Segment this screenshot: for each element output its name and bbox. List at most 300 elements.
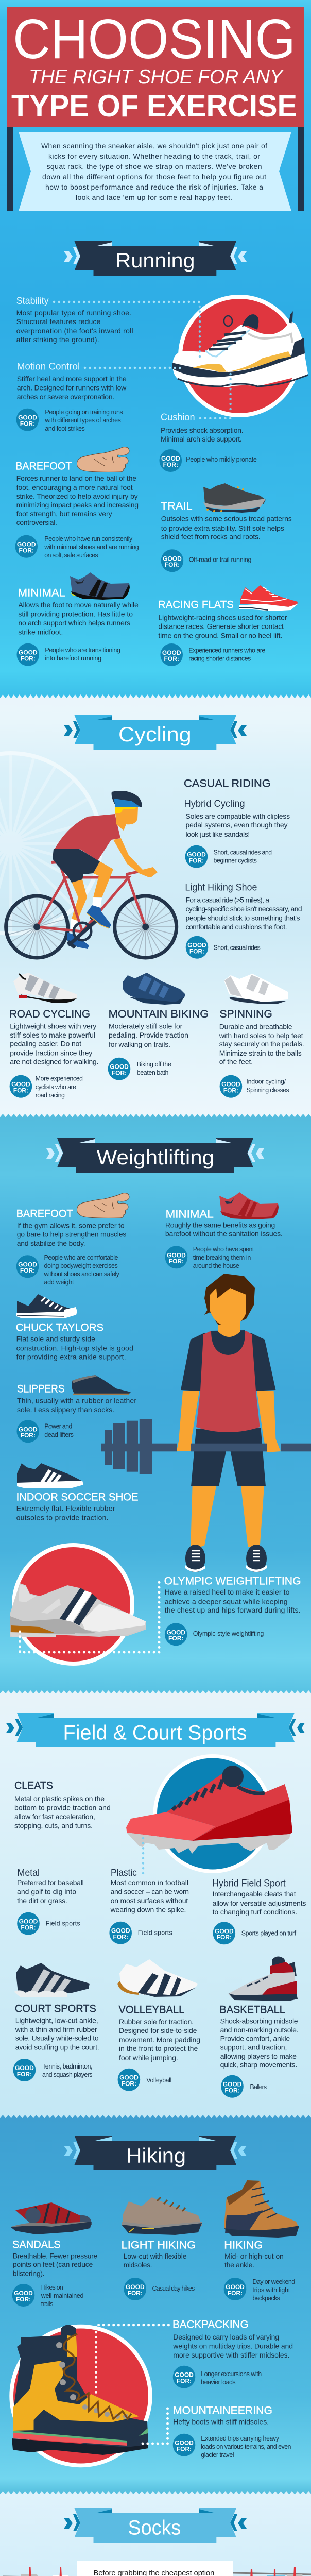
icon: basketball shoe — [228, 1956, 298, 2001]
good for: trail: FOR: — [165, 561, 180, 568]
olympic weightlifting block — [164, 1575, 301, 1614]
olympic shoe illustration — [10, 1543, 146, 1666]
good for: mountaineering — [173, 2434, 291, 2459]
boot connector dots — [96, 2325, 168, 2395]
panel: field and court sports — [0, 1690, 311, 2118]
good for: minimal lifting: around the house — [193, 1262, 239, 1269]
good for: mountain biking: Biking off the — [137, 1061, 171, 1068]
title: THE RIGHT SHOE FOR ANY — [29, 66, 284, 88]
racing flats block: distance races. Generate shorter contact — [158, 622, 284, 631]
plastic block: wearing down the spike. — [110, 1906, 186, 1914]
hiking block — [224, 2180, 299, 2269]
backpacking block: more supportive with stiffer midsoles. — [173, 2351, 289, 2359]
racing flats block: RACING FLATS — [158, 599, 234, 611]
olympic weightlifting block: OLYMPIC WEIGHTLIFTING — [164, 1575, 301, 1587]
basketball block — [219, 1956, 299, 2069]
trail block — [161, 483, 292, 541]
basketball block: allowing players to make — [220, 2052, 297, 2060]
basketball block: BASKETBALL — [219, 2004, 285, 2016]
good for: light hiking — [124, 2278, 195, 2300]
cyclist on bike illustration — [6, 791, 177, 958]
good for: spinning — [220, 1075, 289, 1098]
icon: court shoe — [14, 1963, 90, 1997]
olympic weightlifting block: Have a raised heel to make it easier to — [165, 1588, 290, 1596]
good for: mountain biking — [108, 1058, 171, 1080]
panel: title header — [7, 7, 304, 211]
good for: hybrid: beginner cyclists — [213, 857, 257, 864]
shorts — [191, 1428, 266, 1486]
barefoot block: controversial. — [16, 518, 57, 527]
hybrid field sport block — [212, 1878, 306, 1916]
good for: barefoot: GOOD — [17, 541, 36, 548]
plastic block: and soccer – can be worn — [111, 1888, 189, 1896]
backpacking block: Designed to carry loads of varying — [173, 2333, 279, 2341]
cycling banner — [64, 715, 247, 750]
volleyball block: in the front to protect the — [119, 2044, 198, 2053]
mountaineering block: MOUNTAINEERING — [173, 2405, 272, 2417]
good for: trail: GOOD — [163, 555, 182, 562]
white striped sock — [53, 2567, 77, 2576]
good for: minimal lifting — [165, 1246, 254, 1269]
cushion callout: Cushion — [161, 412, 195, 423]
plastic block — [110, 1868, 189, 1914]
icon: red minimal shoe — [219, 1192, 279, 1219]
good for: sandals: GOOD — [14, 2290, 33, 2297]
good for: road cycling: cyclists who are — [36, 1083, 76, 1091]
good for: olympic: FOR: — [168, 1635, 183, 1642]
hybrid field sport block: Hybrid Field Sport — [212, 1878, 286, 1889]
good for: trail — [161, 549, 251, 572]
panel: cycling — [0, 694, 311, 1117]
slippers block: Thin, usually with a rubber or leather — [17, 1396, 136, 1404]
good for: plastic: Field sports — [138, 1929, 172, 1937]
barefoot block: foot strength, but remains very — [16, 510, 112, 518]
field and court banner — [6, 1713, 305, 1747]
good for: court sports: Tennis, badminton, — [42, 2063, 93, 2070]
cleats block — [14, 1780, 111, 1829]
intro text: look and lace 'em up for some real happy feet. — [76, 193, 232, 201]
good for: road cycling: GOOD — [11, 1081, 30, 1088]
right white sock — [233, 2569, 262, 2576]
good for: hiking: GOOD — [226, 2283, 245, 2291]
motion control callout: Motion Control — [17, 362, 80, 372]
slippers block: sole. Less slippery than socks. — [17, 1405, 114, 1414]
good for: sandals — [12, 2284, 84, 2308]
barbell — [101, 1419, 311, 1474]
crank — [67, 911, 100, 949]
minimal block: MINIMAL — [166, 1208, 214, 1220]
panel: running — [15, 241, 308, 666]
court sports block: avoid scuffing up the court. — [15, 2043, 99, 2051]
good for: sandals: well-maintained — [41, 2292, 84, 2299]
basketball block: Provide comfort, ankle — [220, 2035, 290, 2043]
mountain biking block: pedaling. Provide traction — [109, 1031, 188, 1039]
light hiking block: LIGHT HIKING — [122, 2239, 196, 2251]
hybrid cycling: Hybrid Cycling — [184, 799, 245, 809]
indoor soccer shoe block — [16, 1463, 139, 1522]
light hiking block: midsoles. — [124, 2261, 152, 2269]
good for: basketball: FOR: — [224, 2087, 240, 2094]
icon: sandal — [11, 2202, 92, 2234]
light hiking shoe: cycling-specific shoe isn't necessary, and — [185, 905, 302, 913]
good for: sandals: Hikes on — [41, 2284, 63, 2291]
mountain biking block — [109, 973, 209, 1048]
good for: light hiking shoe: FOR: — [189, 948, 204, 955]
good for: mountaineering: FOR: — [177, 2445, 192, 2452]
good for: barefoot: with minimal shoes and are running — [44, 544, 139, 551]
metal block: Metal — [18, 1868, 40, 1878]
light hiking shoe: people should stick to something that's — [185, 914, 300, 922]
good for: minimal lifting: People who have spent — [193, 1246, 254, 1253]
olympic weightlifting block: the chest up and hips forward during lifts. — [165, 1606, 301, 1614]
good for: light hiking shoe: Short, casual rides — [213, 944, 261, 951]
good for: plastic — [109, 1922, 172, 1944]
light hiking shoe: For a casual ride (>5 miles), a — [185, 896, 269, 904]
icon: indoor soccer shoe — [17, 1463, 83, 1488]
road cycling block: Lightweight shoes with very — [10, 1022, 96, 1030]
barefoot block — [15, 447, 139, 527]
good for: olympic — [165, 1623, 264, 1646]
olympic connector dots — [20, 1582, 159, 1652]
good for: backpacking: GOOD — [175, 2371, 194, 2379]
good for: backpacking: FOR: — [177, 2377, 192, 2384]
good for: backpacking: Longer excursions with — [201, 2370, 262, 2378]
icon: light hiking shoe — [122, 2197, 202, 2235]
good for: basketball: GOOD — [223, 2081, 242, 2088]
good for: mountaineering: Extended trips carrying heavy — [201, 2435, 280, 2442]
good for: olympic: Olympic-style weightlifting — [193, 1630, 264, 1637]
hybrid cycling — [184, 799, 290, 838]
good for: light hiking shoe: GOOD — [187, 942, 206, 949]
plastic block: Most common in football — [111, 1878, 188, 1887]
barefoot block: BAREFOOT — [15, 461, 72, 472]
good for: barefoot — [15, 535, 139, 559]
good for: road cycling: More experienced — [36, 1075, 83, 1082]
light hiking shoe: Light Hiking Shoe — [185, 883, 257, 893]
good for: mountain biking: beaten bath — [137, 1069, 168, 1076]
barefoot block: BAREFOOT — [16, 1208, 73, 1220]
field and court banner: Field & Court Sports — [63, 1722, 247, 1744]
weightlifting banner: Weightlifting — [97, 1146, 214, 1169]
socks banner — [64, 2508, 247, 2543]
good for: cushion: GOOD — [161, 455, 180, 462]
intro text — [41, 142, 267, 201]
title sign posts — [7, 127, 304, 211]
good for: hybrid: FOR: — [189, 857, 204, 865]
good for: metal: FOR: — [21, 1924, 36, 1931]
blue sock — [249, 2569, 285, 2576]
slippers block: SLIPPERS — [17, 1383, 64, 1395]
cycling banner: Cycling — [118, 723, 192, 746]
barefoot block — [16, 1193, 129, 1247]
volleyball block: Designed for side-to-side — [119, 2026, 197, 2035]
good for: hiking: Day or weekend — [252, 2278, 295, 2285]
sandals block — [11, 2202, 97, 2278]
barefoot block: foot, encouraging a more natural foot — [16, 483, 133, 492]
good for: barefoot lifting: GOOD — [18, 1261, 37, 1268]
good for: light hiking: FOR: — [128, 2290, 143, 2297]
good for: hiking — [224, 2278, 295, 2302]
metal block: the dirt or grass. — [17, 1896, 67, 1905]
good for: olympic: GOOD — [166, 1629, 185, 1636]
sandals block: Breathable. Fewer pressure — [13, 2251, 97, 2260]
good for: slippers: GOOD — [19, 1426, 38, 1433]
head — [204, 1274, 255, 1327]
good for: basketball — [221, 2075, 267, 2098]
mountaineering block — [173, 2405, 272, 2426]
icon: road cycling shoe — [13, 973, 77, 1003]
good for: racing flats: racing shorter distances — [188, 655, 251, 663]
good for: mountaineering: glacier travel — [201, 2451, 234, 2459]
minimal block — [18, 572, 139, 636]
hybrid field sport block: allow for versatile adjustments — [213, 1899, 306, 1907]
good for: backpacking: heavier loads — [201, 2379, 236, 2386]
icon: slipper — [72, 1375, 131, 1394]
basketball block: support, and traction, — [220, 2043, 287, 2051]
good for: barefoot lifting: without shoes and can safely — [43, 1270, 120, 1278]
racing flats block — [158, 585, 298, 639]
road cycling block: ROAD CYCLING — [9, 1008, 90, 1020]
icon: chuck taylor shoe — [16, 1294, 77, 1318]
good for: racing flats: FOR: — [164, 655, 179, 663]
good for: sandals: trails — [41, 2300, 53, 2308]
good for: motion control: and foot strikes — [45, 425, 85, 432]
indoor soccer shoe block: outsoles to provide traction. — [16, 1514, 109, 1522]
minimal block — [165, 1192, 283, 1238]
running banner: Running — [115, 249, 195, 272]
spinning block: Durable and breathable — [219, 1023, 292, 1031]
good for: barefoot lifting — [16, 1254, 120, 1286]
good for: minimal: GOOD — [19, 649, 38, 656]
barefoot block: Forces runner to land on the ball of the — [16, 474, 136, 482]
spinning block: stay securely on the pedals. — [219, 1040, 304, 1048]
stability callout: overpronation (the foot's inward roll — [16, 327, 133, 335]
torso — [181, 1319, 275, 1432]
good for: hybrid: Short, causal rides and — [213, 849, 272, 856]
backpacking block: BACKPACKING — [172, 2318, 248, 2330]
slippers block — [17, 1375, 136, 1414]
good for: metal — [17, 1912, 80, 1935]
good for: racing flats — [160, 643, 265, 666]
panel: hiking — [0, 2115, 311, 2494]
sandals block: SANDALS — [12, 2239, 61, 2250]
good for: hybrid field: FOR: — [217, 1934, 232, 1941]
back leg — [67, 879, 89, 949]
trail block: to provide extra stability. Stiff sole helps — [161, 524, 284, 532]
cushion callout — [161, 374, 244, 443]
good for: minimal: into barefoot running — [45, 655, 101, 662]
intro text: how to boost performance and reduce the risk of injuries. Take a — [45, 183, 263, 191]
shoes — [185, 1545, 267, 1572]
good for: cushion: People who mildly pronate — [186, 456, 257, 463]
chuck taylors block — [16, 1294, 133, 1361]
good for: volleyball: FOR: — [122, 2080, 136, 2088]
title — [11, 8, 297, 123]
good for: light hiking shoe — [186, 936, 261, 959]
motion control callout: Stiffer heel and more support in the — [17, 375, 127, 383]
hiking block: HIKING — [224, 2239, 263, 2251]
cleats block: Metal or plastic spikes on the — [14, 1794, 105, 1803]
good for: slippers: FOR: — [21, 1432, 36, 1439]
racing flats block: Lightweight-racing shoes used for shorter — [158, 613, 287, 621]
good for: barefoot lifting: FOR: — [20, 1267, 35, 1274]
plastic block: Plastic — [111, 1868, 137, 1878]
spinning block — [219, 974, 304, 1066]
court sports block: COURT SPORTS — [15, 2003, 96, 2015]
minimal block: Allows the foot to move naturally while — [18, 601, 139, 609]
court sports block: sole. Usually white-soled to — [15, 2034, 99, 2042]
cleats block: allow for fast acceleration, — [14, 1812, 95, 1821]
light hiking shoe — [185, 883, 302, 931]
court sports block: Lightweight, low-cut ankle, — [15, 2016, 98, 2025]
good for: motion control: People going on training runs — [45, 409, 123, 416]
cleats block: stopping, cuts, and turns. — [14, 1821, 93, 1829]
intro text: kicks for every situation. Whether heading to the track, trail, or — [48, 152, 260, 160]
good for: road cycling: road racing — [36, 1092, 65, 1099]
good for: cushion: FOR: — [163, 461, 178, 468]
light hiking block: Low-cut with flexible — [124, 2252, 187, 2260]
volleyball block — [117, 1959, 200, 2062]
icon: foot — [77, 447, 129, 472]
racing flats block: time on the ground. Small or no heel lift. — [158, 631, 282, 639]
icon: foot — [77, 1193, 129, 1218]
title plate — [7, 7, 304, 127]
good for: minimal — [16, 643, 120, 666]
icon: hiking boot — [224, 2180, 299, 2238]
good for: plastic: GOOD — [111, 1927, 130, 1935]
metal block: Preferred for baseball — [17, 1878, 84, 1887]
clothesline with hanging socks — [0, 2567, 311, 2576]
trail block: Outsoles with some serious tread patterns — [161, 515, 292, 523]
hiking block: the ankle. — [224, 2261, 254, 2269]
court sports block: with a thin and firm rubber — [15, 2025, 97, 2033]
icon: mountain biking shoe — [123, 973, 185, 1005]
good for: minimal: FOR: — [21, 655, 36, 663]
good for: motion control: GOOD — [18, 414, 37, 421]
good for: court sports: FOR: — [17, 2071, 32, 2078]
cushion callout: Provides shock absorption. — [161, 426, 244, 434]
title: CHOOSING — [13, 8, 296, 71]
basketball block: Shock-absorbing midsole — [220, 2016, 298, 2025]
rider body — [53, 791, 158, 928]
good for: motion control: with different types of arches — [44, 417, 121, 424]
barefoot block: go bare to help strengthen muscles — [17, 1230, 126, 1239]
good for: hybrid field — [213, 1922, 297, 1944]
backpacking block — [172, 2318, 293, 2359]
good for: spinning: FOR: — [223, 1087, 238, 1094]
barefoot block: and stabilize the body. — [17, 1239, 85, 1247]
running shoe illustration — [172, 295, 308, 417]
hiking block: Mid- or high-cut on — [224, 2252, 284, 2260]
motion control callout: arch. Designed for runners with low — [17, 384, 127, 392]
hybrid cycling: pedal systems, even though they — [185, 821, 287, 829]
mountain biking block: for walking on trails. — [109, 1040, 170, 1048]
good for: spinning: Spinning classes — [246, 1087, 289, 1094]
stability callout: Most popular type of running shoe. — [16, 309, 131, 317]
good for: mountaineering: loads on various terrains, and even — [201, 2443, 291, 2450]
stability callout: Structural features reduce — [16, 317, 101, 326]
good for: hiking: backpacks — [252, 2295, 280, 2302]
stability callout — [16, 296, 201, 357]
weightlifting banner — [46, 1138, 264, 1173]
good for: motion control: FOR: — [20, 420, 35, 428]
mountaineering boot illustration — [9, 2325, 152, 2467]
barefoot block: minimizing impact peaks and increasing — [16, 501, 139, 509]
socks banner: Socks — [128, 2516, 181, 2539]
cleats block: CLEATS — [14, 1780, 53, 1792]
good for: backpacking — [173, 2366, 262, 2388]
icon: spinning shoe — [224, 974, 288, 1004]
good for: minimal lifting: GOOD — [167, 1251, 186, 1259]
socks info card — [77, 2561, 233, 2576]
plastic block: on most surfaces without — [111, 1896, 188, 1905]
cushion callout: Minimal arch side support. — [161, 435, 242, 443]
road cycling block: are not designed for walking. — [10, 1057, 98, 1065]
sandals block: points on feet (can reduce — [13, 2260, 93, 2268]
good for: barefoot lifting: doing bodyweight exercises — [44, 1262, 118, 1269]
minimal block: still providing protection. Has little to — [18, 610, 133, 618]
good for: hiking: FOR: — [228, 2290, 243, 2297]
motion control callout: arches or severe overpronation. — [17, 393, 114, 401]
road cycling block — [9, 973, 98, 1065]
good for: volleyball — [118, 2069, 171, 2091]
mountaineering block: Hefty boots with stiff midsoles. — [173, 2418, 269, 2426]
volleyball block: Rubber sole for traction. — [119, 2018, 194, 2026]
volleyball block: VOLLEYBALL — [118, 2004, 184, 2016]
good for: racing flats: Experienced runners who are — [188, 647, 265, 654]
chuck taylors block: construction. High-top style is good — [16, 1344, 133, 1352]
hybrid cycling: Soles are compatible with clipless — [185, 812, 290, 820]
good for: light hiking: Casual day hikes — [152, 2285, 195, 2292]
good for: road cycling: FOR: — [13, 1087, 28, 1094]
good for: hybrid field: GOOD — [215, 1927, 234, 1935]
good for: sandals: FOR: — [16, 2296, 31, 2303]
good for: spinning: GOOD — [221, 1081, 240, 1088]
light hiking shoe: comfortable and cushions the foot. — [185, 923, 287, 931]
trail block: shield feet from rocks and roots. — [161, 533, 261, 541]
panel: weightlifting — [0, 1114, 311, 1693]
intro text: down all the different options for those feet to help you figure out — [42, 173, 266, 181]
good for: barefoot: FOR: — [19, 547, 34, 554]
good for: trail: Off-road or trail running — [189, 556, 251, 564]
mountain biking block: MOUNTAIN BIKING — [109, 1008, 209, 1020]
icon: minimal shoe — [70, 572, 130, 600]
intro ribbon — [19, 132, 291, 211]
good for: spinning: Indoor cycling/ — [246, 1078, 286, 1086]
spinning block: Minimize strain to the balls — [219, 1049, 302, 1057]
sandals block: blistering). — [13, 2269, 45, 2278]
stability callout: Stability — [16, 296, 49, 307]
good for: hybrid: GOOD — [187, 851, 206, 858]
good for: volleyball: Volleyball — [146, 2077, 171, 2084]
good for: hiking: trips with light — [252, 2286, 290, 2294]
grey sock — [21, 2567, 57, 2576]
good for: volleyball: GOOD — [119, 2074, 139, 2081]
good for: metal: GOOD — [19, 1918, 38, 1925]
good for: minimal lifting: FOR: — [169, 1258, 184, 1265]
icon: volleyball shoe — [117, 1959, 198, 1997]
minimal block: no arch support which helps runners — [18, 619, 130, 627]
mountain biking block: Moderately stiff sole for — [109, 1022, 183, 1030]
road cycling block: pedaling easier. Do not — [10, 1040, 81, 1048]
hybrid field sport block: Interchangeable cleats that — [213, 1890, 296, 1898]
basketball block: and non-marking outsole. — [220, 2026, 299, 2034]
minimal block: MINIMAL — [18, 587, 65, 599]
intro text: squat rack, the type of shoe we strap on matters. We've broken — [46, 162, 262, 171]
good for: basketball: Ballers — [250, 2083, 267, 2091]
good for: slippers — [16, 1420, 74, 1443]
chuck taylors block: CHUCK TAYLORS — [16, 1321, 103, 1333]
